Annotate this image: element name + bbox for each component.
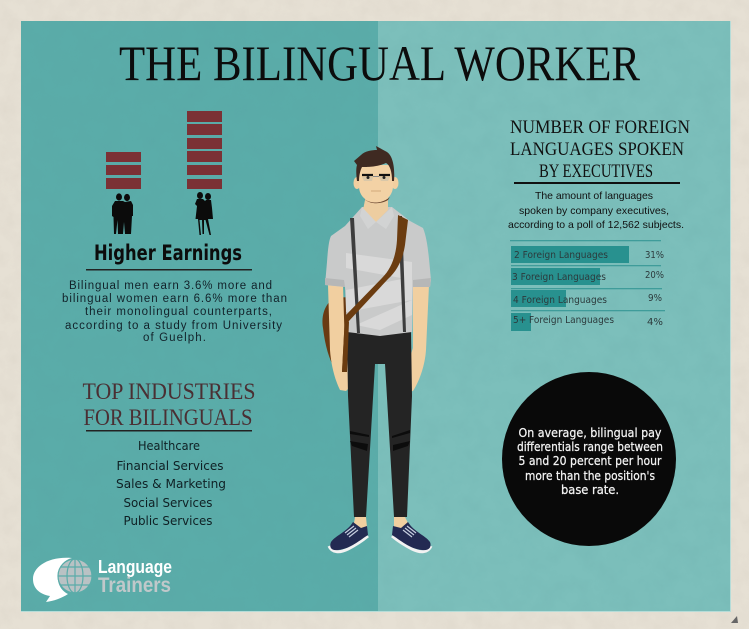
- mouth: [371, 190, 381, 192]
- heading: foreign languages: BY EXECUTIVES: [539, 161, 653, 182]
- title: THE BILINGUAL WORKER: [119, 35, 641, 91]
- icon: men earnings bars: [106, 152, 141, 189]
- illustration: man: [322, 146, 431, 552]
- icon: female couple silhouette: [195, 192, 213, 235]
- list: industries: Healthcare: [138, 438, 200, 453]
- panel: number of foreign languages: [508, 117, 690, 331]
- heading: top industries: FOR BILINGUALS: [84, 405, 252, 430]
- bag: [322, 297, 349, 372]
- icon: women earnings bars: [187, 111, 222, 189]
- bar: 5+ languages: 4%: [647, 317, 663, 328]
- ankles: [354, 517, 408, 531]
- face: [359, 165, 393, 203]
- bar: 5+ languages: [511, 313, 663, 331]
- list: industries: Social Services: [124, 495, 212, 510]
- bar: 2 languages: 2 Foreign Languages: [514, 250, 608, 261]
- heading: top industries: [82, 379, 256, 430]
- text: earnings description: of Guelph.: [143, 332, 206, 344]
- bar chart: languages: [510, 240, 665, 331]
- callout: pay differentials: On average, bilingual pay: [518, 425, 662, 440]
- icon: globe: [58, 559, 92, 593]
- heading: higher earnings: Higher Earnings: [94, 241, 242, 265]
- text: logo wordmark: Trainers: [98, 574, 171, 597]
- heading: foreign languages: NUMBER OF FOREIGN: [510, 117, 690, 138]
- text: earnings description: [62, 280, 287, 344]
- left arm: [328, 285, 352, 391]
- suspenders: [350, 216, 406, 333]
- panel: higher earnings: [62, 111, 287, 344]
- shirt: [325, 207, 431, 336]
- list: industries: [116, 438, 226, 528]
- text: logo wordmark: Language: [98, 557, 172, 577]
- icon: male couple silhouette: [112, 193, 133, 234]
- callout: pay differentials: base rate.: [561, 482, 619, 497]
- bar: 3 languages: 20%: [645, 270, 664, 281]
- neck: [363, 195, 388, 222]
- bar: 3 languages: 3 Foreign Languages: [512, 272, 606, 283]
- bar: 4 languages: 4 Foreign Languages: [513, 295, 607, 306]
- text: poll description: spoken by company executives,: [519, 205, 669, 217]
- icon: speech bubble: [33, 558, 72, 602]
- shoulder strap: [342, 215, 408, 372]
- bar: 5+ languages: 5+ Foreign Languages: [513, 315, 614, 326]
- callout: pay differentials: differentials range between: [517, 439, 663, 454]
- trousers: [347, 331, 412, 517]
- callout: pay differentials: more than the position's: [525, 468, 655, 483]
- callout: pay differentials: 5 and 20 percent per hour: [518, 453, 662, 468]
- panel: left teal background: [21, 21, 378, 612]
- heading: top industries: TOP INDUSTRIES: [82, 379, 256, 404]
- bar: 4 languages: 9%: [648, 293, 662, 304]
- panel: top industries: [82, 379, 256, 528]
- glasses and eyes: [362, 175, 390, 181]
- text: earnings description: their monolingual counterparts,: [85, 306, 272, 318]
- text: poll description: [508, 190, 684, 231]
- list: industries: Sales & Marketing: [116, 476, 226, 491]
- text: poll description: according to a poll of 12,562 subjects.: [508, 219, 684, 231]
- bar: 2 languages: 31%: [645, 250, 664, 261]
- right shoe: [392, 522, 431, 552]
- bar: 3 languages: [511, 268, 664, 285]
- text: poll description: The amount of languages: [535, 190, 653, 202]
- ears: [354, 177, 360, 189]
- collar: [360, 207, 394, 229]
- text: earnings description: bilingual women earn 6.6% more than: [62, 293, 287, 305]
- list: industries: Financial Services: [116, 458, 224, 473]
- bar: 4 languages: [511, 290, 662, 307]
- logo: language trainers: [33, 557, 172, 602]
- text: logo wordmark: [98, 557, 172, 597]
- heading: foreign languages: LANGUAGES SPOKEN: [510, 139, 684, 160]
- text: earnings description: according to a study from University: [65, 320, 282, 332]
- icon: resize handle: [731, 616, 738, 623]
- panel: right teal background: [378, 21, 731, 612]
- hair: [354, 146, 394, 181]
- text: earnings description: Bilingual men earn 3.6% more and: [69, 280, 272, 292]
- list: industries: Public Services: [124, 513, 212, 528]
- bar: 2 languages: [511, 246, 664, 263]
- callout: pay differentials: [502, 372, 676, 546]
- right arm: [405, 285, 429, 392]
- heading: foreign languages: [510, 117, 690, 182]
- left shoe: [329, 522, 368, 552]
